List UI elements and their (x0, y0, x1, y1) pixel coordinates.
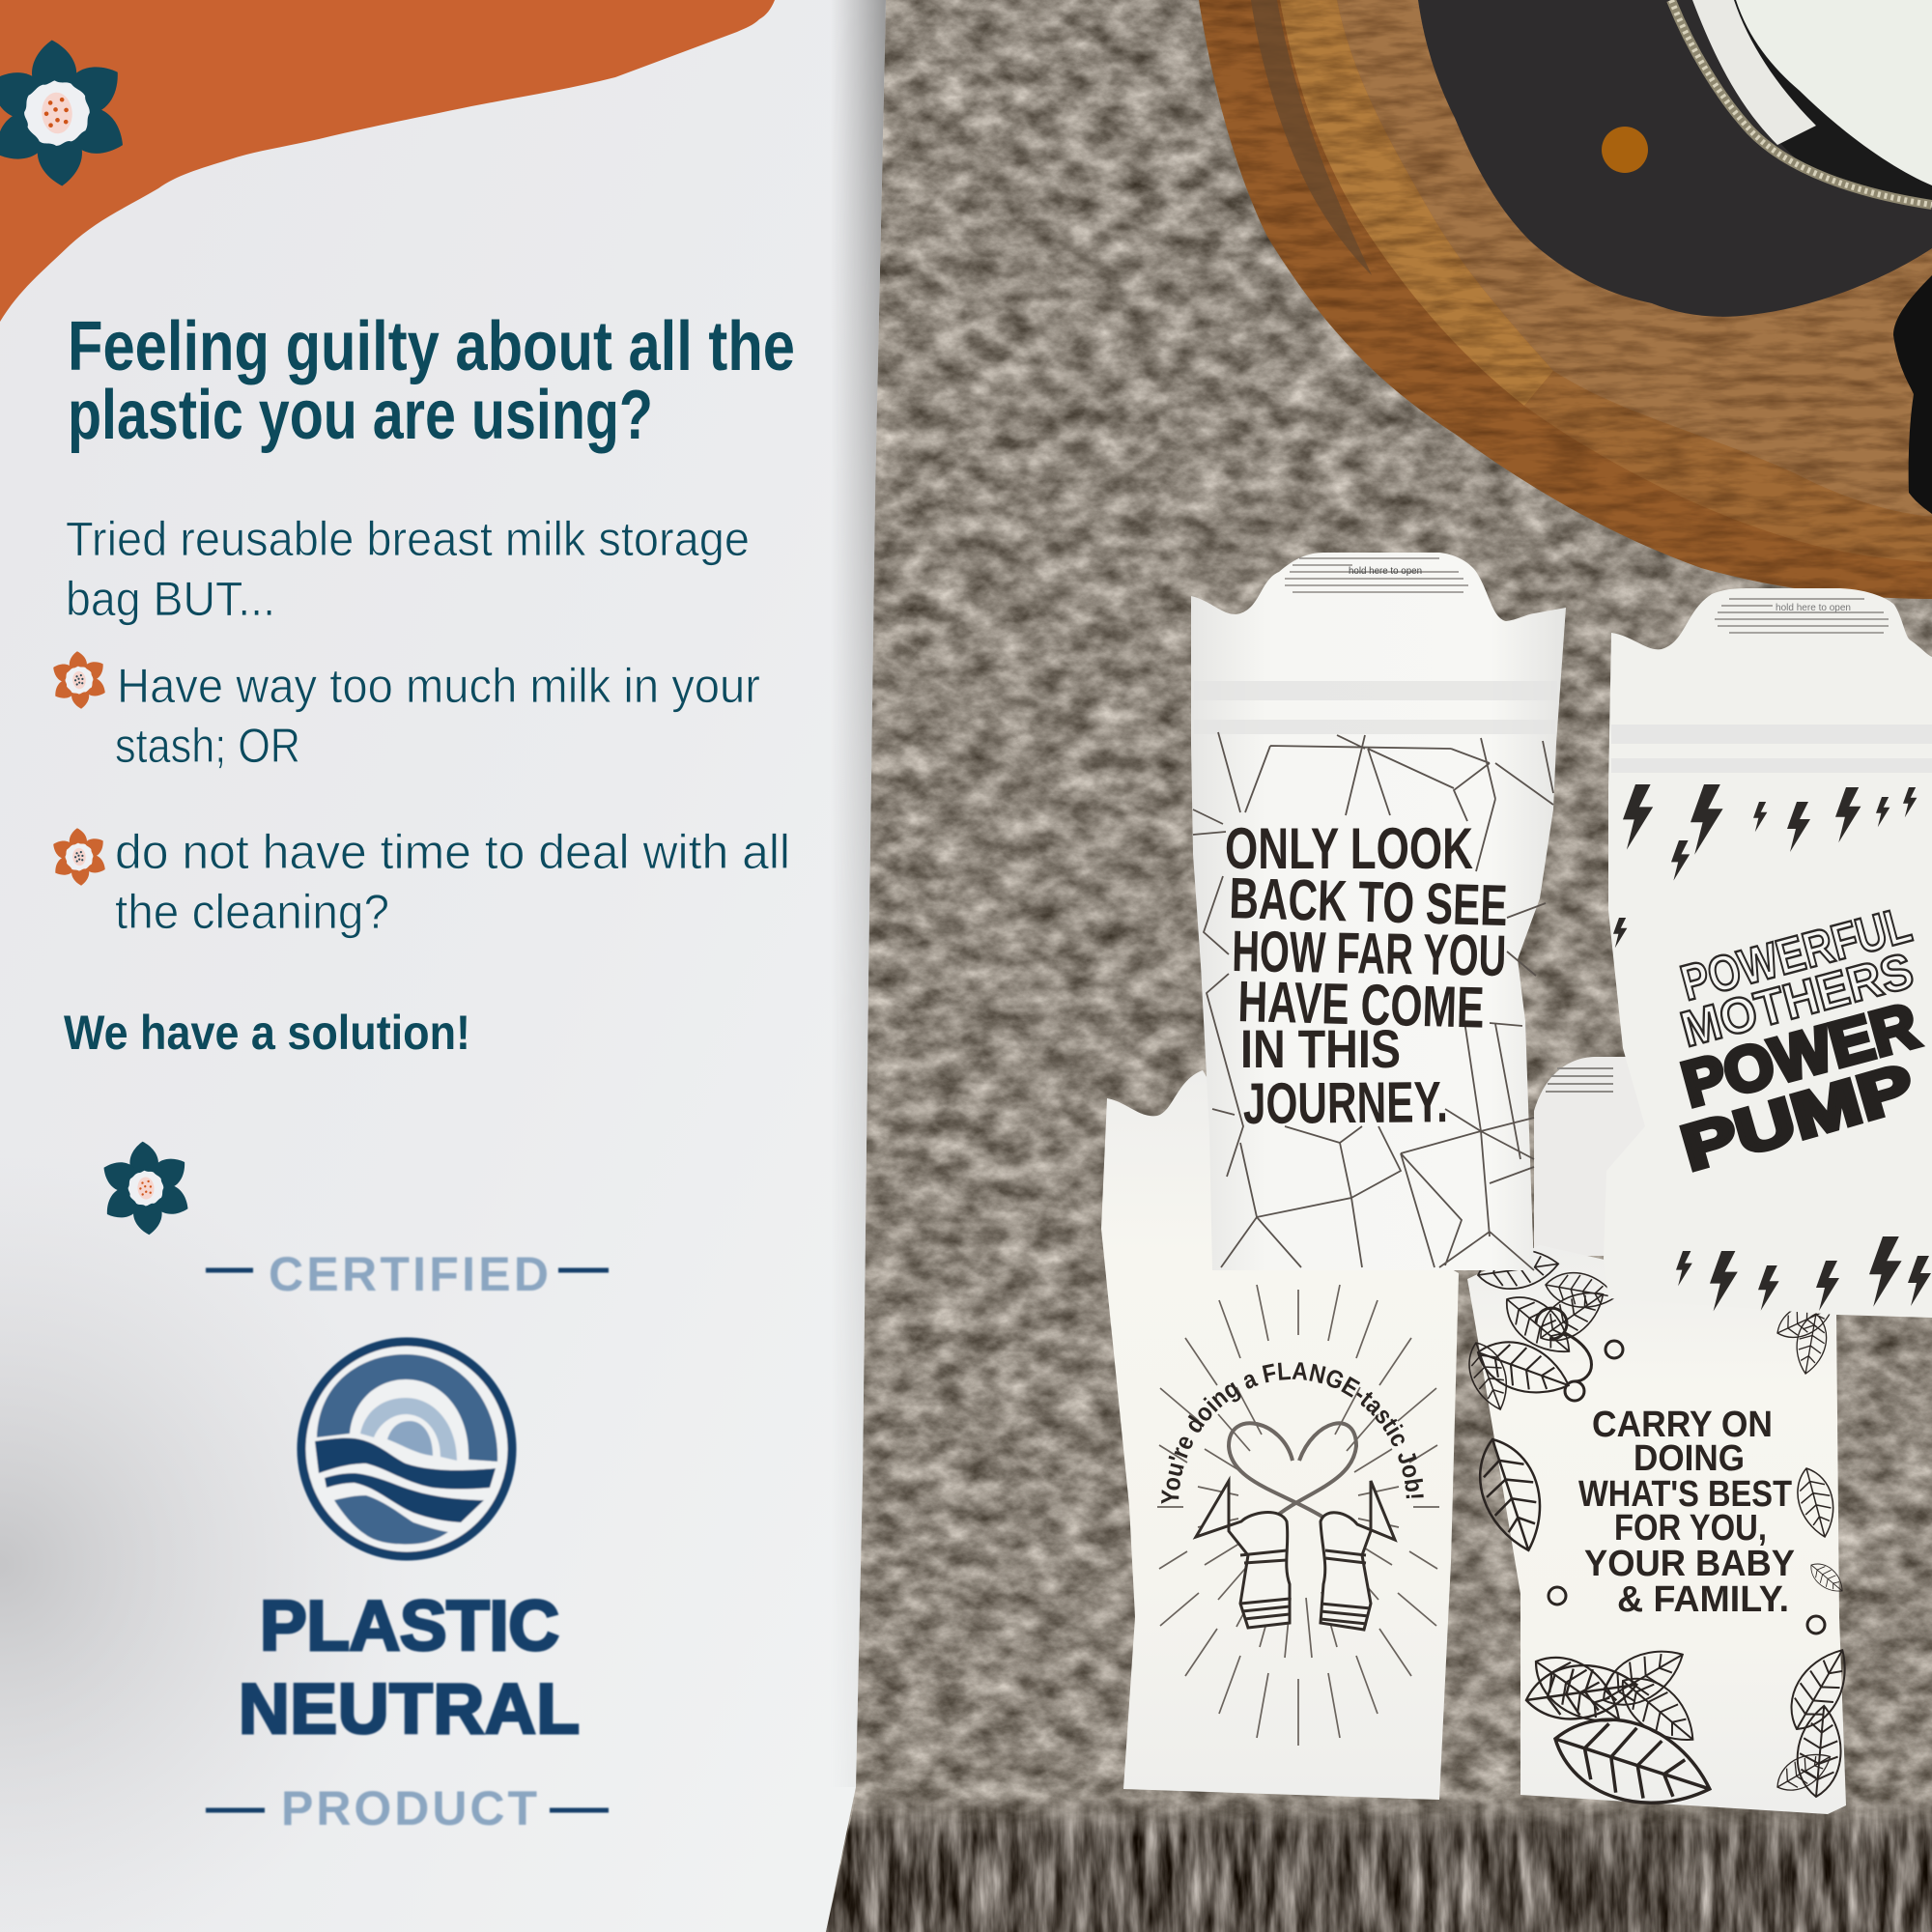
plastic neutral wordmark (239, 1587, 580, 1748)
dark lining behind zipper (1700, 0, 1932, 205)
heart outline (1229, 1423, 1356, 1519)
bag body (1191, 553, 1566, 1270)
plastic neutral certification badge (206, 1247, 609, 1835)
tear-tab caption: hold here to open (1776, 603, 1851, 613)
handwritten message: CARRY ON (1592, 1405, 1773, 1445)
motivational message: HOW FAR YOU (1232, 919, 1507, 988)
plastic neutral wordmark: NEUTRAL (239, 1670, 580, 1748)
dark streak on rim (1251, 0, 1372, 275)
photo: wooden tray with bag and pump (1199, 0, 1932, 599)
leaves top left (1461, 1244, 1623, 1558)
left breast pump (1196, 1481, 1290, 1628)
orange corner blob (0, 0, 775, 322)
brass rivet (1602, 127, 1648, 173)
bag: Only look back to see (1191, 553, 1566, 1270)
leaves right side (1770, 1294, 1861, 1799)
black strap (1893, 275, 1932, 514)
solution line: We have a solution! (64, 1006, 470, 1060)
intro text (66, 512, 750, 626)
photo: wool rug background (826, 0, 1932, 1932)
tab of bag (1534, 1057, 1662, 1256)
handwritten message: YOUR BABY (1584, 1544, 1795, 1584)
bullet two text: do not have time to deal with all (115, 825, 790, 879)
tray outer rim (1199, 0, 1932, 599)
tray floor (1337, 0, 1932, 517)
bullet one flower (48, 649, 110, 711)
tear-tab hatch (1285, 558, 1468, 592)
bag body (1101, 1070, 1459, 1800)
flower: top navy (0, 35, 136, 191)
bag: Carry on doing what's best (1461, 1057, 1861, 1824)
motivational message: IN THIS (1240, 1018, 1401, 1079)
intro text: Tried reusable breast milk storage (66, 512, 750, 566)
right breast pump (1321, 1481, 1395, 1630)
panel edge shadow (837, 0, 886, 1723)
product label: PRODUCT (281, 1781, 537, 1835)
white pump inner case (1692, 0, 1816, 145)
motivational message: HAVE COME (1237, 969, 1485, 1040)
bag: Powerful mothers power pump (1604, 588, 1932, 1318)
flower: lower navy (95, 1138, 197, 1238)
solid slogan lines: POWER (1674, 989, 1925, 1121)
leaves bottom left (1522, 1587, 1721, 1824)
certified label: CERTIFIED (269, 1247, 549, 1301)
heading (68, 308, 795, 454)
solid slogan lines (1673, 989, 1925, 1183)
tray light inner rim band (1280, 0, 1553, 406)
white pump body (1736, 0, 1932, 185)
geometric web lines (1193, 732, 1553, 1270)
heading: Feeling guilty about all the (68, 308, 795, 385)
zip seal band (1611, 724, 1932, 773)
left text panel background (0, 0, 898, 1932)
motivational message: JOURNEY. (1243, 1069, 1448, 1136)
outlined slogan lines: MOTHERS (1675, 943, 1919, 1059)
bullet two flower (48, 826, 110, 888)
heading: plastic you are using? (68, 377, 653, 454)
handwritten message: WHAT'S BEST (1578, 1474, 1792, 1515)
bullet one text (115, 659, 760, 773)
handwritten message: DOING (1634, 1438, 1745, 1479)
black fabric pump case (1418, 0, 1932, 317)
handwritten message (1578, 1405, 1795, 1620)
lightning bolts top row (1613, 784, 1917, 948)
tab hatch (1546, 1068, 1613, 1092)
tear-tab caption: hold here to open (1349, 566, 1422, 577)
logo: sun over waves (301, 1342, 512, 1556)
bullet one text: Have way too much milk in your (117, 659, 760, 713)
bullet two text: the cleaning? (115, 885, 389, 939)
tray rim right section (1524, 371, 1932, 562)
curved message: You're doing a FLANGE-tastic Job! (1161, 1362, 1424, 1504)
zip seal band (1194, 681, 1557, 734)
bullet one text: stash; OR (115, 719, 300, 773)
handwritten message: & FAMILY. (1617, 1579, 1789, 1620)
photo: rug fringe (826, 1797, 1932, 1932)
handwritten message: FOR YOU, (1614, 1508, 1767, 1548)
motivational message: ONLY LOOK (1225, 816, 1473, 881)
tear-tab hatch (1715, 599, 1889, 633)
solid slogan lines: PUMP (1673, 1050, 1921, 1183)
bag: You're doing a FLANGE-tastic Job (1101, 1070, 1459, 1800)
plastic neutral wordmark: PLASTIC (260, 1587, 559, 1665)
lightning bolts bottom row (1676, 1236, 1931, 1311)
zipper (1671, 0, 1932, 205)
radiating rays (1157, 1285, 1439, 1746)
bullet two text (115, 825, 790, 939)
intro text: bag BUT... (66, 572, 275, 626)
motivational message: BACK TO SEE (1229, 866, 1508, 938)
motivational message (1225, 816, 1508, 1136)
bag body (1467, 1245, 1846, 1814)
bag body (1604, 588, 1932, 1318)
